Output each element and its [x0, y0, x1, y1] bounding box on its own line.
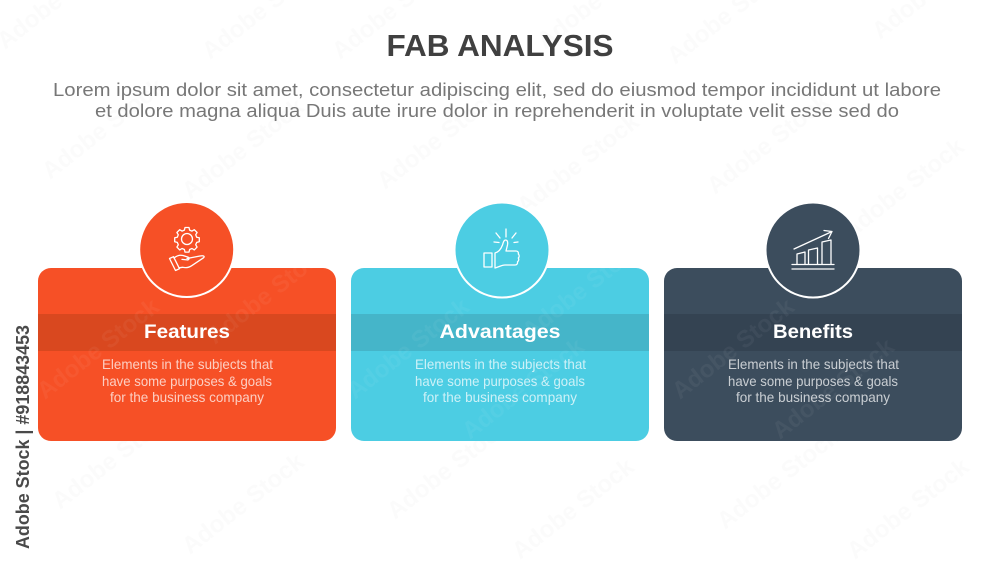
description: have some purposes & goals: [102, 373, 272, 389]
description: Elements in the subjects that: [415, 356, 586, 372]
panel: features: Adobe Stock: [202, 238, 335, 350]
panel: advantages: [342, 202, 650, 445]
description: have some purposes & goals: [415, 373, 585, 389]
description: Elements in the subjects that: [728, 356, 899, 372]
description: Elements in the subjects that: [102, 356, 273, 372]
intro text: Lorem ipsum dolor sit amet, consectetur adipiscing elit, sed do eiusmod tempor incididunt ut labore: [53, 79, 941, 100]
watermark on background: Adobe Stock: [507, 453, 640, 563]
panel: advantages: Adobe Stock: [457, 333, 590, 445]
watermark on background: Adobe Stock: [372, 83, 505, 195]
watermark on background: Adobe Stock: [512, 108, 645, 220]
description: for the business company: [423, 389, 577, 405]
watermark on background: Adobe Stock: [37, 73, 170, 185]
title: FAB ANALYSIS: [386, 28, 614, 63]
heading: Benefits: [773, 321, 853, 343]
intro text: et dolore magna aliqua Duis aute irure dolor in reprehenderit in voluptate velit esse sed do: [95, 100, 899, 121]
watermark on background: Adobe Stock: [382, 413, 515, 525]
panel: benefits: [664, 202, 962, 445]
panel: advantages: Adobe Stock: [517, 233, 650, 345]
intro text: [53, 79, 941, 121]
watermark on background: Adobe Stock: [177, 93, 310, 205]
description: for the business company: [110, 389, 264, 405]
stock id label: Adobe Stock | #918843453: [13, 325, 33, 549]
icon: thumbs up: [484, 229, 519, 268]
icon: growth chart: [792, 230, 834, 269]
watermark on background: Adobe Stock: [702, 88, 835, 200]
description: [102, 356, 273, 405]
heading: Features: [144, 321, 230, 343]
heading: Advantages: [440, 321, 561, 343]
panel: advantages: Adobe Stock: [342, 293, 475, 405]
description: for the business company: [736, 389, 890, 405]
watermark on background: Adobe Stock: [842, 453, 975, 563]
watermark on background: Adobe Stock: [177, 448, 310, 560]
watermark on background: Adobe Stock: [47, 403, 180, 515]
panel: benefits: Adobe Stock: [767, 333, 900, 445]
panel: features: [32, 201, 336, 441]
panel: features: Adobe Stock: [32, 293, 165, 405]
watermark on background: Adobe Stock: [837, 133, 970, 245]
description: have some purposes & goals: [728, 373, 898, 389]
icon: gear on hand: [170, 228, 204, 270]
panel: benefits: Adobe Stock: [667, 293, 800, 405]
watermark on background: Adobe Stock: [712, 423, 845, 535]
description: [728, 356, 899, 405]
description: [415, 356, 586, 405]
